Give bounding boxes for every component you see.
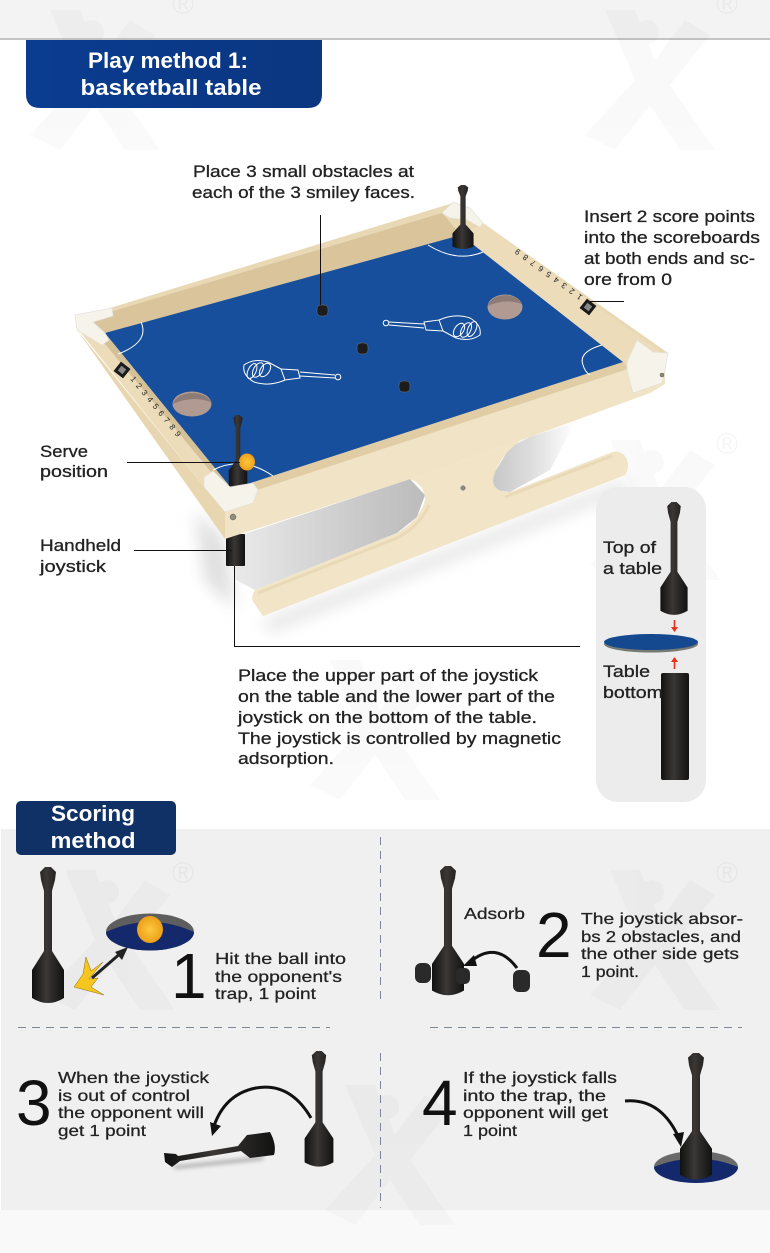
step 3 — [16, 1051, 333, 1169]
scoreboard left — [114, 362, 183, 439]
table disc — [604, 634, 698, 652]
plastic corner front — [204, 471, 258, 512]
description: Hit the ball into — [215, 951, 346, 968]
text: magnetic explanation: Place the upper part of the joystick — [238, 666, 539, 685]
leader lines — [127, 215, 624, 646]
description — [58, 1070, 210, 1140]
heading: play method: basketball table — [80, 75, 262, 100]
description: into the trap, the — [463, 1088, 606, 1105]
soft floor shadows — [195, 480, 630, 632]
text: serve position: position — [40, 462, 108, 481]
labels: Table — [603, 662, 650, 681]
scoreboard left: 1 2 3 4 5 6 7 8 9 — [128, 375, 183, 439]
description: trap, 1 point — [215, 986, 317, 1003]
description: bs 2 obstacles, and — [581, 929, 741, 946]
number: 3 — [16, 1067, 52, 1139]
trap with ball — [106, 914, 194, 950]
description: the opponent's — [215, 969, 342, 986]
watermarks lower — [45, 857, 738, 1225]
curved arrow — [625, 1101, 678, 1136]
description: When the joystick — [58, 1070, 210, 1087]
text: magnetic explanation: on the table and the lower part of the — [238, 687, 555, 706]
obstacles — [415, 963, 530, 992]
red arrows — [671, 620, 678, 669]
right rim — [461, 223, 660, 362]
labels: Top of — [603, 538, 656, 557]
back wall — [93, 213, 461, 333]
fallen joystick shadow — [172, 1156, 265, 1169]
description: the opponent will — [58, 1105, 204, 1122]
watermarks lower: ® — [716, 857, 738, 890]
illustration: table — [75, 185, 668, 632]
description: get 1 point — [58, 1123, 147, 1140]
description: is out of control — [58, 1088, 190, 1105]
panel: scoring background — [1, 829, 770, 1210]
description — [463, 1070, 617, 1140]
hand drawing left — [244, 361, 341, 384]
text: handheld joystick: Handheld — [40, 536, 121, 555]
description: If the joystick falls — [463, 1070, 617, 1087]
number: 1 — [171, 940, 207, 1012]
step 4 — [422, 1053, 738, 1183]
heading: scoring method: method — [50, 828, 136, 853]
small obstacles — [317, 305, 410, 392]
labels — [603, 538, 663, 702]
arrow — [92, 952, 122, 978]
text: score points: at both ends and sc- — [584, 249, 755, 268]
screws — [230, 373, 664, 520]
heading: play method — [26, 40, 322, 108]
joystick lower part — [226, 534, 245, 566]
description: 1 point — [463, 1123, 518, 1140]
text: handheld joystick — [39, 536, 121, 576]
description: opponent will get — [463, 1105, 609, 1122]
text: magnetic explanation: joystick on the bottom of the table. — [237, 708, 537, 727]
joystick — [432, 866, 464, 995]
joystick back right — [452, 185, 474, 249]
left outer face — [77, 330, 225, 539]
joystick front — [229, 415, 247, 488]
text: obstacles: Place 3 small obstacles at — [193, 162, 414, 181]
table frame top — [75, 203, 668, 512]
traps — [172, 294, 522, 416]
description: the other side gets — [581, 946, 739, 963]
front inner strip — [253, 362, 628, 490]
text: magnetic explanation — [237, 666, 562, 768]
upright joystick — [305, 1051, 333, 1167]
number: 4 — [422, 1067, 458, 1139]
top joystick part — [660, 502, 688, 615]
right cutout shadow — [493, 422, 575, 492]
labels: a table — [603, 559, 662, 578]
label: Adsorb — [464, 906, 525, 923]
bottom cylinder — [661, 673, 689, 780]
labels: bottom — [603, 683, 663, 702]
heading: scoring method — [16, 801, 176, 855]
dashed dividers — [18, 837, 742, 1208]
step 1 — [32, 867, 346, 1012]
text: serve position: Serve — [40, 442, 88, 461]
blue playing surface — [105, 235, 623, 489]
text: magnetic explanation: The joystick is controlled by magnetic — [238, 729, 562, 748]
description — [215, 951, 346, 1003]
top grey band — [0, 0, 770, 40]
watermarks lower: ® — [172, 857, 194, 890]
left cutout shadow — [226, 479, 425, 590]
text: score points — [584, 207, 760, 289]
text: score points: ore from 0 — [584, 270, 672, 289]
number: 2 — [536, 899, 572, 971]
fallen joystick — [164, 1132, 275, 1167]
serve ball — [239, 454, 255, 470]
yellow impact burst — [74, 957, 104, 995]
plastic corners back — [75, 202, 668, 393]
corner arcs — [118, 245, 602, 476]
step 2 — [415, 866, 743, 995]
heading: scoring method: Scoring — [51, 801, 135, 826]
stand and legs — [252, 437, 628, 616]
description — [581, 911, 743, 981]
text: obstacles: each of the 3 smiley faces. — [192, 183, 415, 202]
panel: joystick detail — [596, 487, 706, 802]
table front face — [225, 360, 665, 539]
text: handheld joystick: joystick — [39, 557, 107, 576]
text: score points: into the scoreboards — [584, 228, 760, 247]
text: obstacles — [192, 162, 415, 202]
watermarks upper: ® — [716, 428, 738, 461]
text: serve position — [40, 442, 108, 481]
text: magnetic explanation: adsorption. — [238, 749, 334, 768]
watermarks upper — [30, 0, 738, 800]
description: 1 point. — [581, 964, 639, 981]
curved arrow — [214, 1087, 311, 1126]
joystick — [680, 1053, 712, 1179]
scoreboard right — [513, 246, 596, 315]
hand drawing right — [383, 316, 480, 339]
bottom band — [0, 1210, 770, 1253]
heading: play method: Play method 1: — [88, 48, 248, 73]
arrow — [470, 952, 517, 968]
joystick — [32, 867, 64, 1003]
scoreboard right: 1 2 3 4 5 6 7 8 9 — [513, 246, 584, 302]
trap — [654, 1151, 738, 1183]
text: score points: Insert 2 score points — [584, 207, 755, 226]
description: The joystick absor- — [581, 911, 743, 928]
left rim — [77, 328, 232, 489]
leg lips — [258, 456, 612, 593]
